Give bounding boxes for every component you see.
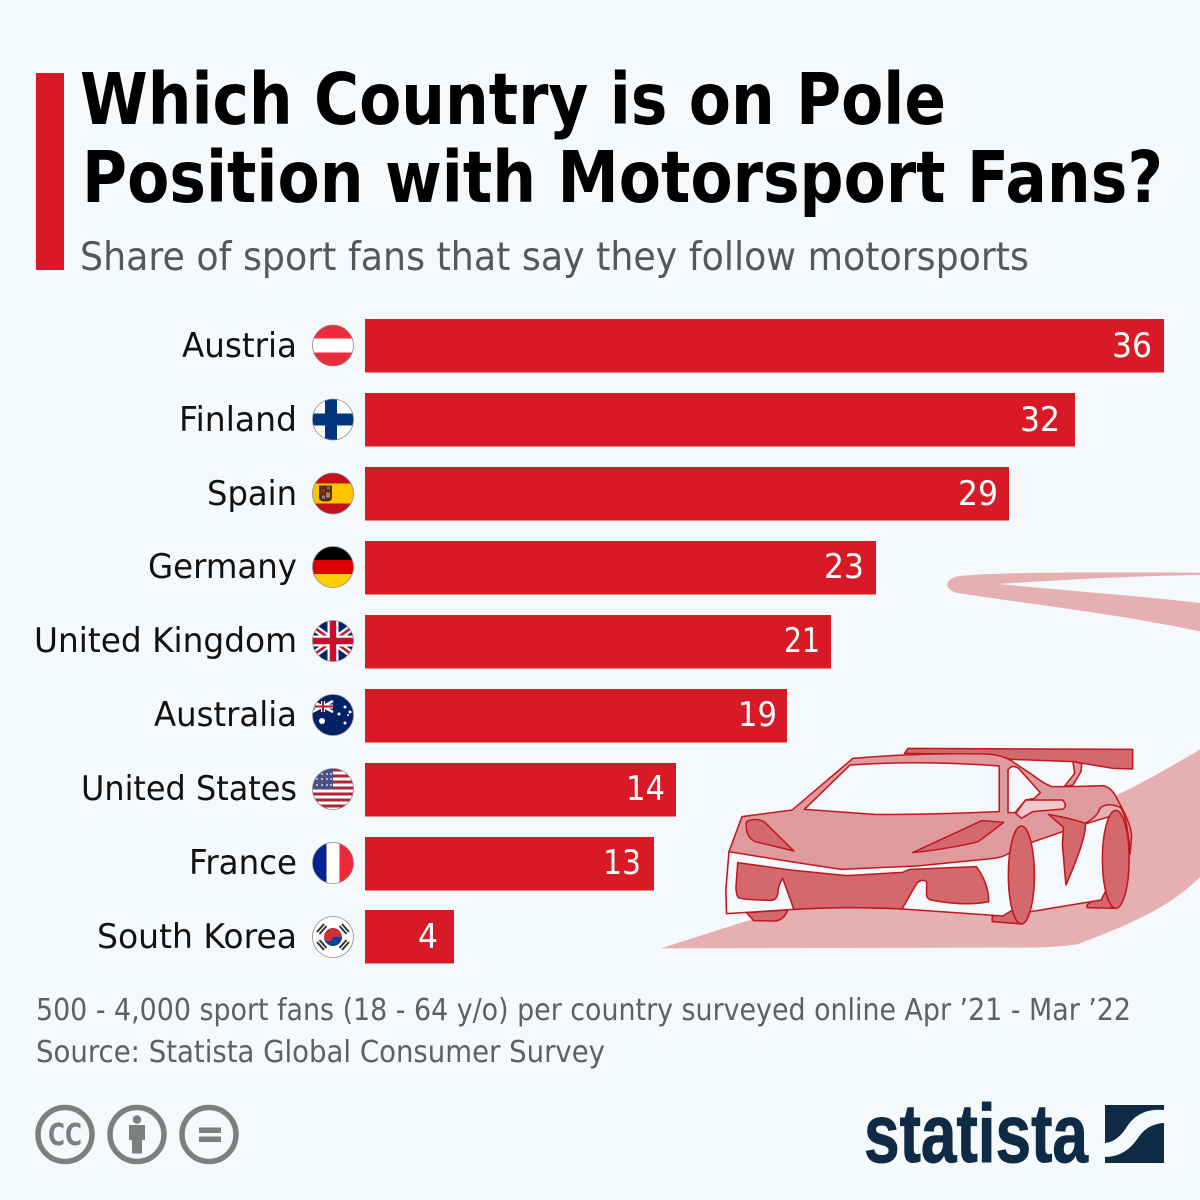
title: Which Country is on Pole xyxy=(80,58,946,141)
upper body xyxy=(729,754,1132,869)
value: 21 xyxy=(784,621,820,661)
label: Austria xyxy=(182,326,297,366)
label: France xyxy=(189,843,297,883)
bar xyxy=(365,763,676,816)
row: Germany xyxy=(148,541,876,594)
row: South Korea xyxy=(97,910,454,964)
wheels xyxy=(1008,810,1129,924)
label: Finland xyxy=(179,400,297,440)
illustration: race track bend xyxy=(947,572,1200,632)
mirror xyxy=(1016,800,1065,818)
bar xyxy=(365,393,1075,446)
icon: no derivatives xyxy=(182,1108,236,1162)
bar xyxy=(365,910,454,964)
flag: United States xyxy=(312,768,354,810)
label: Germany xyxy=(148,547,297,587)
value: 4 xyxy=(418,917,438,957)
value: 13 xyxy=(603,843,641,883)
flag: Australia xyxy=(312,694,354,736)
icon: attribution xyxy=(110,1108,164,1162)
row: France xyxy=(189,837,654,890)
value: 23 xyxy=(824,547,864,587)
label: South Korea xyxy=(97,917,297,957)
row: Spain xyxy=(207,467,1009,520)
flag: Germany xyxy=(312,546,354,588)
value: 36 xyxy=(1112,326,1152,366)
illustration: race car on road xyxy=(661,748,1200,948)
label: Spain xyxy=(207,474,297,514)
subtitle: Share of sport fans that say they follow motorsports xyxy=(80,235,1029,280)
bar xyxy=(365,541,876,594)
footnote: Source: Statista Global Consumer Survey xyxy=(36,1035,605,1070)
label: United Kingdom xyxy=(34,621,297,661)
flag: South Korea xyxy=(312,916,354,958)
flag: France xyxy=(312,842,354,884)
label: United States xyxy=(81,769,297,809)
flag: Finland xyxy=(312,398,354,440)
title accent bar xyxy=(36,73,64,270)
bar xyxy=(365,689,787,742)
row: Austria xyxy=(182,319,1164,372)
windscreen xyxy=(804,763,999,814)
icon: creative commons xyxy=(38,1108,92,1162)
bar xyxy=(365,837,654,890)
row: Finland xyxy=(179,393,1075,446)
lower body xyxy=(726,813,1130,916)
bar xyxy=(365,319,1164,372)
tyres behind body xyxy=(747,890,1117,924)
flag: Spain xyxy=(312,472,354,514)
bar xyxy=(365,615,831,668)
rear wing xyxy=(904,748,1133,787)
front intake xyxy=(736,863,989,909)
icon: creative commons: CC xyxy=(48,1118,82,1153)
flag: Austria xyxy=(312,324,354,366)
value: 14 xyxy=(626,769,665,809)
headlights xyxy=(746,819,1004,853)
row: United Kingdom xyxy=(34,615,831,668)
side window xyxy=(1008,767,1040,813)
row: United States xyxy=(81,763,676,816)
value: 29 xyxy=(958,474,998,514)
value: 32 xyxy=(1020,400,1060,440)
label: Australia xyxy=(154,695,297,735)
logo: statista wordmark: statista xyxy=(864,1087,1089,1180)
logo: statista mark xyxy=(1105,1105,1164,1163)
side vent xyxy=(1048,814,1085,885)
row: Australia xyxy=(154,689,787,742)
bar xyxy=(365,467,1009,520)
value: 19 xyxy=(738,695,777,735)
road xyxy=(661,749,1200,948)
flag: United Kingdom xyxy=(312,620,354,662)
